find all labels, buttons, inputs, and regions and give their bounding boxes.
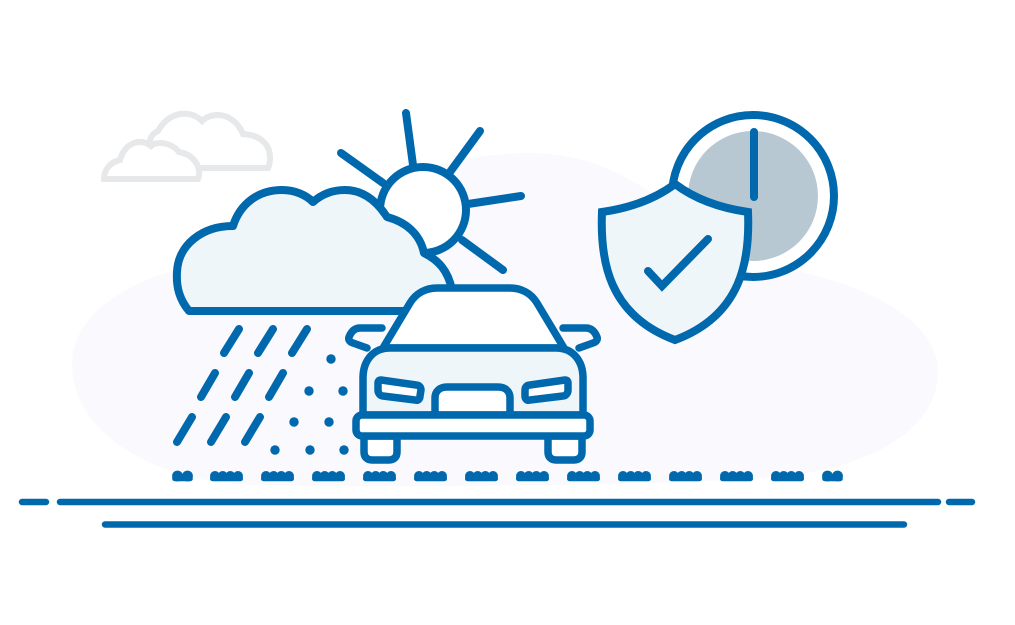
- clock grey disc: [688, 131, 818, 261]
- road lines: [22, 502, 972, 524]
- clock hand: [750, 132, 758, 197]
- shield: [602, 184, 748, 340]
- back cloud: [150, 114, 270, 168]
- left headlight: [378, 380, 421, 400]
- road markings: [172, 471, 843, 481]
- front cloud: [104, 142, 199, 179]
- icon: shield with check: [602, 184, 748, 340]
- clock face: [672, 115, 834, 277]
- car: [349, 288, 597, 460]
- left wheel: [364, 436, 397, 460]
- rain streaks: [177, 329, 307, 442]
- side mirrors: [349, 328, 597, 348]
- right headlight: [525, 380, 568, 400]
- sun disc: [380, 167, 466, 253]
- grille: [435, 387, 510, 415]
- sun rays: [341, 113, 521, 270]
- icon: rain cloud: [177, 190, 452, 311]
- car body: [363, 348, 583, 415]
- right wheel: [548, 436, 582, 460]
- windshield: [383, 288, 564, 348]
- bumper: [356, 415, 590, 436]
- check mark: [648, 239, 708, 286]
- icon: clock: [672, 115, 834, 277]
- icon: sun: [341, 113, 521, 270]
- small grey clouds: [104, 114, 270, 179]
- hail dots: [270, 354, 349, 455]
- background blob: [72, 153, 938, 486]
